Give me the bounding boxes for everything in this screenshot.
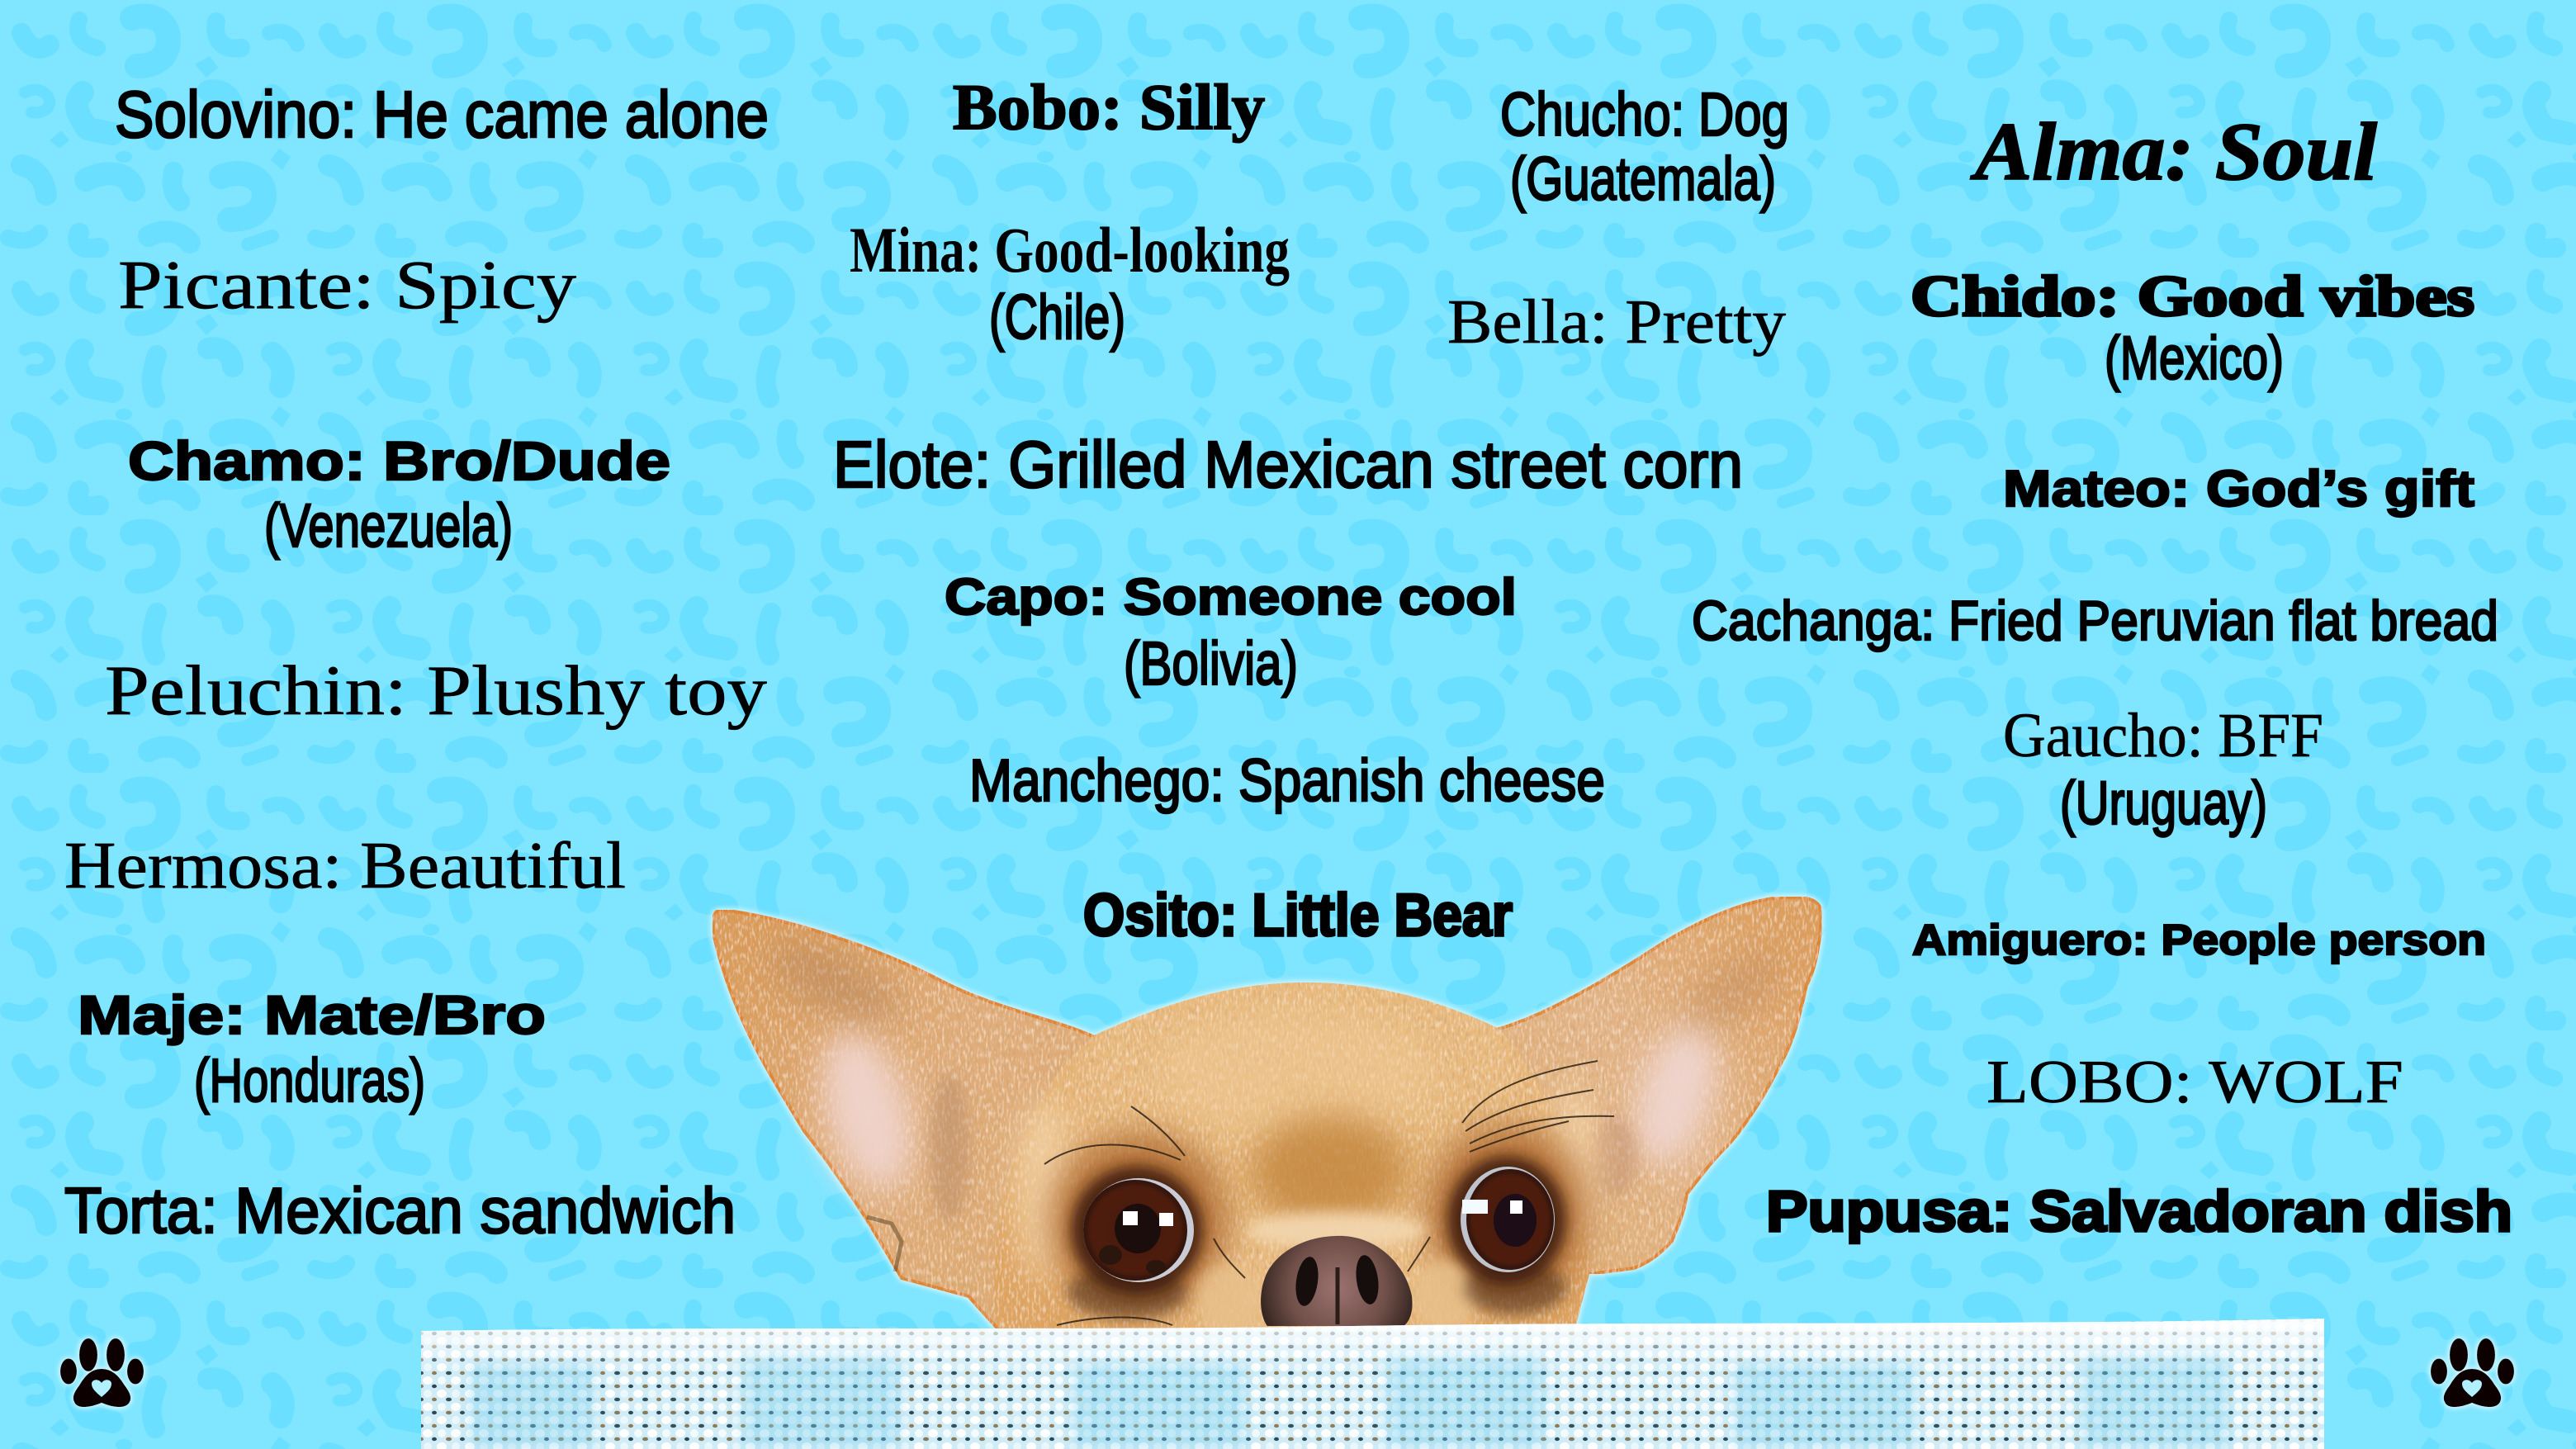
right ear (1486, 897, 1821, 1274)
nose (1261, 1236, 1413, 1326)
Capo: Capo: Someone cool (945, 569, 1517, 626)
woven blanket (421, 1319, 2324, 1449)
Gaucho: Gaucho: BFF (2003, 701, 2323, 770)
Peluchin: Peluchin: Plushy toy (105, 651, 767, 730)
Mina: (Chile) (989, 282, 1125, 353)
Hermosa: Hermosa: Beautiful (64, 830, 626, 902)
Gaucho: (Uruguay) (2060, 769, 2267, 837)
Chido: (Mexico) (2105, 324, 2284, 392)
Chucho: Chucho: Dog (1500, 80, 1789, 149)
column 4: names (1692, 106, 2512, 1243)
Chamo: Chamo: Bro/Dude (128, 430, 670, 491)
Alma: Alma: Soul (1970, 106, 2377, 197)
Mina: Mina: Good-looking (850, 214, 1290, 286)
whiskers (1044, 1061, 1614, 1325)
Chucho (1500, 80, 1789, 213)
icon: left paw print (60, 1338, 144, 1407)
Amiguero: Amiguero: People person (1912, 916, 2486, 964)
column 1: names (64, 78, 769, 1247)
head (994, 983, 1596, 1338)
left eye (1071, 1166, 1203, 1295)
column 2: names (833, 71, 1743, 949)
Chucho: (Guatemala) (1510, 144, 1776, 213)
column 3: names (1447, 80, 1789, 357)
chihuahua peeking over the blanket (713, 897, 1821, 1338)
Maje: Maje: Mate/Bro (78, 984, 546, 1045)
Chamo: (Venezuela) (264, 491, 513, 560)
Capo (945, 569, 1517, 698)
Maje (78, 984, 546, 1115)
Osito: Osito: Little Bear (1083, 883, 1513, 949)
Picante: Picante: Spicy (118, 247, 576, 324)
Solovino: Solovino: He came alone (115, 78, 769, 151)
Lobo: LOBO: WOLF (1986, 1049, 2403, 1116)
Bobo: Bobo: Silly (953, 71, 1265, 143)
Torta: Torta: Mexican sandwich (64, 1174, 736, 1247)
Bella: Bella: Pretty (1447, 287, 1786, 357)
Mina (850, 214, 1290, 353)
right eye (1447, 1156, 1566, 1285)
Cachanga: Cachanga: Fried Peruvian flat bread (1692, 590, 2498, 652)
Chamo (128, 430, 670, 560)
Maje: (Honduras) (194, 1046, 425, 1115)
Manchego: Manchego: Spanish cheese (969, 748, 1605, 814)
Gaucho (2003, 701, 2323, 837)
Chido (1911, 265, 2474, 392)
Elote: Elote: Grilled Mexican street corn (833, 428, 1743, 501)
Chido: Chido: Good vibes (1911, 265, 2474, 329)
Capo: (Bolivia) (1124, 629, 1298, 698)
left ear (713, 910, 1106, 1329)
Pupusa: Pupusa: Salvadoran dish (1766, 1179, 2512, 1243)
Mateo: Mateo: God’s gift (2003, 461, 2474, 518)
icon: right paw print (2431, 1338, 2514, 1407)
